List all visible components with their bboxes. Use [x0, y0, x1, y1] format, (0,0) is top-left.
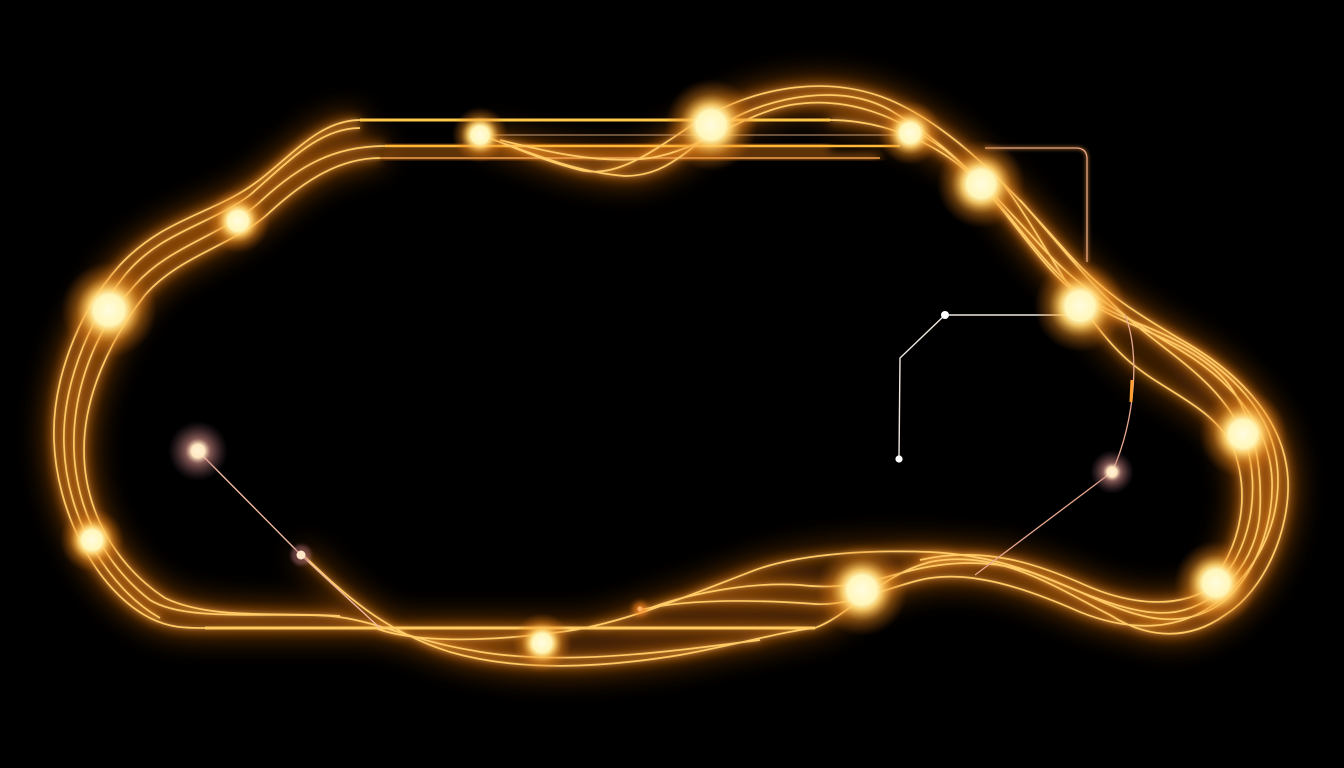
node: pink left — [168, 421, 228, 481]
node: lower right — [1174, 541, 1258, 625]
node: right middle — [1034, 260, 1126, 352]
inner orange glow — [54, 86, 1288, 666]
wide amber halo around the loop — [54, 86, 1288, 666]
node: left — [61, 262, 157, 358]
node: bottom centre — [512, 613, 572, 673]
node: small orange spark — [633, 602, 647, 616]
node: upper left — [206, 189, 270, 253]
node: bottom centre right — [816, 544, 908, 636]
connector: white circuit line — [895, 311, 1070, 463]
connector: right pink line — [975, 315, 1134, 575]
node: pink right — [1090, 450, 1134, 494]
top and bottom straight rails — [205, 120, 900, 628]
connector: top right bracket — [985, 148, 1087, 262]
node: top right small — [878, 101, 942, 165]
glowing nodes — [60, 79, 1287, 673]
node: lower left — [60, 508, 124, 572]
main loop strands — [54, 86, 1288, 666]
node: upper right — [937, 140, 1025, 228]
node: top centre — [665, 79, 757, 171]
node: far right — [1199, 390, 1287, 478]
connector: lower left pink line — [198, 451, 380, 628]
node: top left small — [452, 107, 508, 163]
